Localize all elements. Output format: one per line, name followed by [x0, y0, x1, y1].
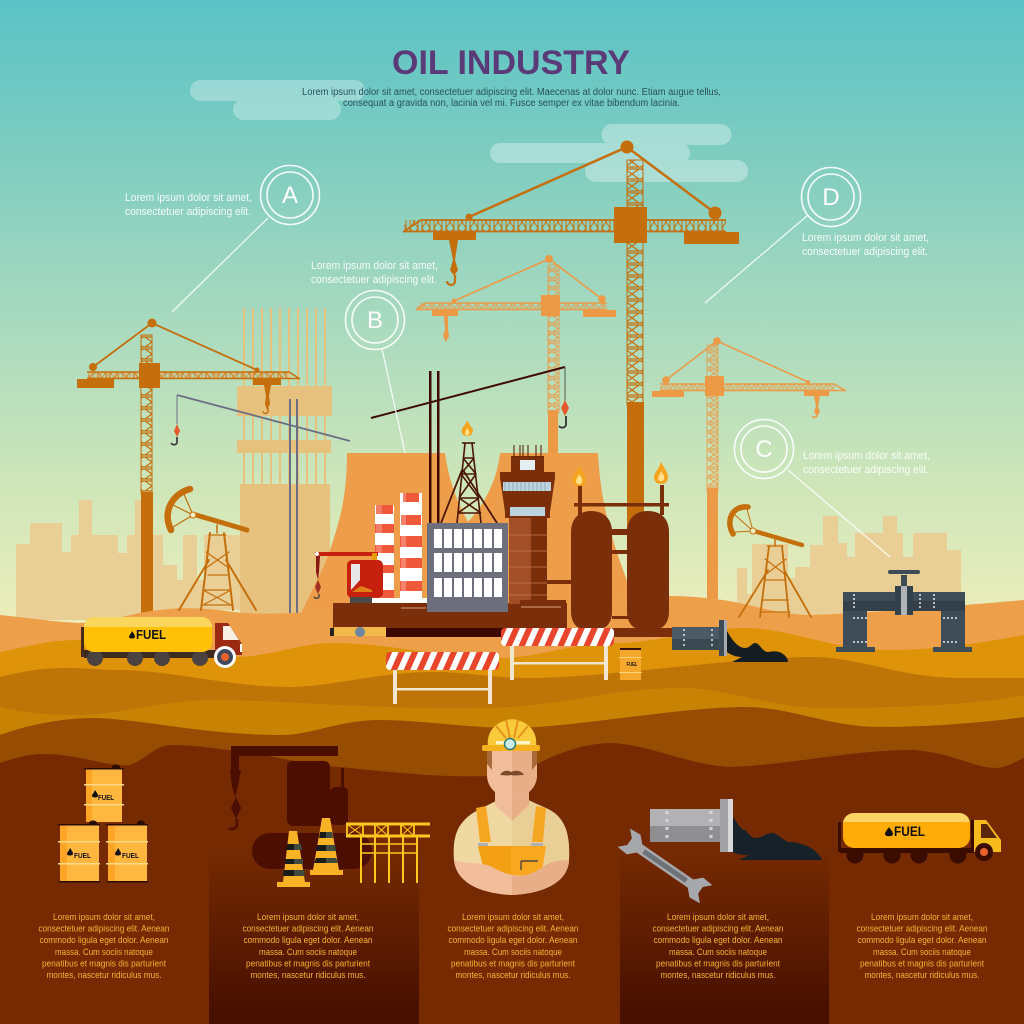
text block: column 3: penatibus et magnis dis parturient [451, 958, 575, 970]
platform shadow bar [386, 628, 516, 637]
text block: column 4: montes, nascetur ridiculus mus. [660, 970, 776, 981]
text block: column 1: consectetuer adipiscing elit. Aenean [38, 924, 170, 934]
text block: column 2: penatibus et magnis dis parturient [246, 958, 370, 970]
city skyline: left [16, 500, 240, 620]
gray poles with base [274, 399, 300, 648]
tower crane: large centre [403, 140, 739, 627]
valve pipeline [836, 570, 972, 652]
icon: crane silhouette [229, 746, 372, 869]
tower crane: left [77, 318, 300, 622]
icon: fuel barrels [58, 764, 148, 882]
broken pipe leaking oil [672, 620, 788, 662]
text block: column 4 [652, 912, 784, 981]
text block: column 3: consectetuer adipiscing elit. Aenean [448, 924, 578, 934]
text block: column 4: commodo ligula eget dolor. Aenean [654, 935, 782, 946]
text block: column 5: massa. Cum sociis natoque [873, 947, 971, 958]
icon: traffic cone left [277, 831, 310, 887]
subtitle [302, 87, 721, 109]
cloud: upper right [490, 124, 748, 182]
ground layer 4 [0, 688, 1024, 1024]
text block: column 2: consectetuer adipiscing elit. Aenean [242, 924, 374, 934]
panel: column 2 shading [209, 850, 419, 1024]
text block: column 1: montes, nascetur ridiculus mus. [46, 970, 162, 981]
ground layer 3 [0, 657, 1024, 1024]
callout: D: Lorem ipsum dolor sit amet, [802, 232, 929, 244]
ground layer 5 [0, 707, 1024, 1024]
small fuel drum: FUEL [626, 662, 638, 668]
deep soil layer [0, 743, 1024, 1024]
cooling tower: right [465, 453, 650, 640]
text block: column 1: massa. Cum sociis natoque [55, 947, 153, 958]
refinery tanks [547, 485, 669, 628]
callout: C: consectetuer adipiscing elit. [803, 464, 929, 476]
gray office building [427, 523, 508, 612]
callout: C: Lorem ipsum dolor sit amet, [803, 450, 930, 462]
callout: A: A [282, 182, 298, 209]
text block: column 5: penatibus et magnis dis parturient [860, 958, 984, 970]
text block: column 2: montes, nascetur ridiculus mus. [250, 970, 366, 981]
tower crane: right [652, 337, 846, 613]
callout: B [311, 260, 438, 453]
title: OIL INDUSTRY [392, 44, 630, 82]
callout: A [125, 166, 320, 312]
text block: column 5: Lorem ipsum dolor sit amet, [871, 912, 973, 923]
pump jack: right [730, 507, 811, 617]
text block: column 1 [38, 912, 170, 981]
text block: column 4: massa. Cum sociis natoque [669, 947, 767, 958]
icon: fuel barrels: FUEL [122, 851, 139, 860]
icon: traffic cone right [310, 818, 343, 875]
text block: column 2: commodo ligula eget dolor. Aenean [244, 935, 372, 946]
text block: column 3: Lorem ipsum dolor sit amet, [462, 912, 564, 923]
callout: B: B [367, 307, 383, 334]
tower crane: medium centre [416, 255, 616, 460]
excavator [314, 552, 383, 603]
text block: column 3: massa. Cum sociis natoque [464, 947, 562, 958]
pump jack: left [168, 489, 256, 610]
ground layer 2 [0, 628, 1024, 1024]
icon: fuel barrels: FUEL [98, 795, 115, 802]
platform deck [333, 603, 567, 629]
callout: D [705, 168, 929, 303]
chimney: left [375, 505, 394, 599]
oil derrick [441, 443, 497, 523]
barrier: lower [386, 652, 499, 704]
ground layer 1 [0, 596, 1024, 1024]
callout: C [734, 420, 930, 557]
text block: column 1: Lorem ipsum dolor sit amet, [53, 912, 155, 923]
text block: column 4: consectetuer adipiscing elit. Aenean [652, 924, 784, 934]
flame: left tank [572, 465, 586, 486]
gray crane jib with hook [171, 395, 350, 445]
text block: column 4: penatibus et magnis dis parturient [656, 958, 780, 970]
callout: B: consectetuer adipiscing elit. [311, 274, 437, 286]
text block: column 2: Lorem ipsum dolor sit amet, [257, 912, 359, 923]
text block: column 1: penatibus et magnis dis parturient [42, 958, 166, 970]
pipe under platform [330, 627, 386, 637]
icon: leaking pipe [650, 799, 822, 860]
flame: derrick [462, 420, 473, 436]
cooling tower: left [290, 453, 470, 640]
icon: worker [454, 719, 569, 895]
icon: scaffold [346, 824, 430, 883]
callout: A: Lorem ipsum dolor sit amet, [125, 192, 252, 204]
text block: column 3: montes, nascetur ridiculus mus. [456, 970, 570, 981]
callout: C: C [755, 436, 773, 463]
text block: column 3 [448, 912, 578, 981]
barrier: upper [501, 628, 614, 680]
text block: column 2: massa. Cum sociis natoque [259, 947, 357, 958]
text block: column 5: montes, nascetur ridiculus mus. [864, 970, 980, 981]
callout: A: consectetuer adipiscing elit. [125, 206, 251, 218]
subtitle: Lorem ipsum dolor sit amet, consectetuer adipiscing elit. Maecenas at dolor nunc. Etiam augue tellus, [302, 87, 721, 98]
text block: column 3: commodo ligula eget dolor. Aenean [448, 935, 578, 946]
rear derrick poles [429, 371, 440, 526]
text block: column 1: commodo ligula eget dolor. Aenean [40, 935, 168, 946]
text block: column 5 [856, 912, 988, 981]
cloud: upper left [190, 80, 365, 120]
text block: column 4: Lorem ipsum dolor sit amet, [667, 912, 769, 923]
city skyline: right [737, 516, 961, 620]
fuel truck: left [81, 617, 242, 668]
tank base bar [612, 628, 672, 637]
icon: wrench [617, 828, 713, 904]
chimney: right [400, 493, 422, 599]
icon: fuel truck [838, 813, 1001, 864]
panel: column 4 shading [620, 850, 829, 1024]
callout: D: D [822, 184, 840, 211]
text block: column 5: commodo ligula eget dolor. Aenean [858, 935, 986, 946]
white platform [372, 598, 428, 604]
subtitle: consequat a gravida non, lacinia vel mi. Fusce semper ex vitae bibendum lacinia. [343, 98, 680, 109]
icon: fuel barrels: FUEL [74, 851, 91, 860]
small fuel drum [619, 648, 642, 680]
fuel truck: left: FUEL [136, 627, 166, 642]
icon: fuel truck: FUEL [894, 823, 925, 839]
text block: column 2 [242, 912, 374, 981]
refinery control tower [401, 445, 570, 608]
text block: column 5: consectetuer adipiscing elit. Aenean [856, 924, 988, 934]
building under construction [237, 308, 332, 614]
callout: D: consectetuer adipiscing elit. [802, 246, 928, 258]
flame: right tank [654, 462, 668, 484]
dark crane jib with hook [371, 367, 569, 428]
callout: B: Lorem ipsum dolor sit amet, [311, 260, 438, 272]
